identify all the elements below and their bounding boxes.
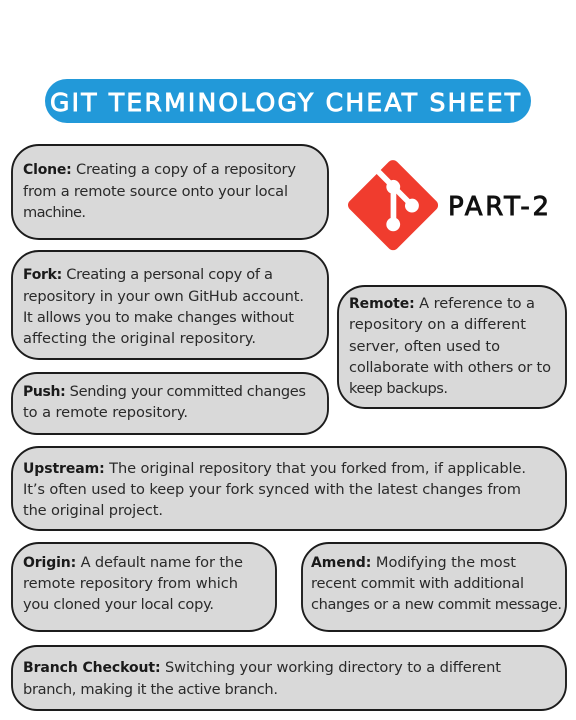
panel: Upstream [12, 447, 566, 530]
text: Amend definition: recent commit with additional [311, 575, 524, 592]
text: Origin definition: remote repository from which [23, 575, 238, 592]
panel: Clone [12, 145, 328, 239]
text: Fork definition [23, 266, 304, 347]
text: Remote definition: server, often used to [349, 338, 500, 355]
text: Amend definition: changes or a new commit message. [311, 596, 562, 613]
text: Push definition: Push: Sending your committed changes [23, 383, 306, 400]
text: Clone definition: from a remote source onto your local [23, 183, 288, 200]
text: Fork definition: affecting the original repository. [23, 330, 256, 347]
panel: Remote [338, 286, 566, 408]
text: Amend definition [311, 554, 562, 613]
text: Push definition: to a remote repository. [23, 404, 188, 421]
text: Origin definition [23, 554, 243, 613]
text: Remote definition: repository on a different [349, 316, 526, 333]
text: Clone definition: machine. [23, 204, 86, 221]
text: Origin definition: Origin: A default name for the [23, 554, 243, 571]
panel: Amend [302, 543, 566, 631]
text: Upstream definition: Upstream: The original repository that you forked from, if applicable. [23, 460, 526, 477]
text: Remote definition [349, 295, 551, 397]
text: Clone definition: Clone: Creating a copy of a repository [23, 161, 296, 178]
text: Remote definition: keep backups. [349, 380, 448, 397]
heading: part number: PART-2 [448, 192, 549, 222]
text: Push definition [23, 383, 306, 421]
text: Upstream definition [23, 460, 526, 519]
panel: Branch Checkout [12, 646, 566, 710]
panel: Origin [12, 543, 276, 631]
title banner: GIT TERMINOLOGY CHEAT SHEET [50, 88, 521, 117]
text: Origin definition: you cloned your local copy. [23, 596, 214, 613]
text: Branch Checkout definition: branch, making it the active branch. [23, 681, 278, 698]
text: Clone definition [23, 161, 296, 221]
panel: Fork [12, 251, 328, 359]
panel: Push [12, 373, 328, 434]
text: Fork definition: Fork: Creating a personal copy of a [23, 266, 273, 283]
text: Branch Checkout definition [23, 659, 501, 698]
text: Amend definition: Amend: Modifying the most [311, 554, 516, 571]
title banner [45, 79, 531, 123]
text: Branch Checkout definition: Branch Checkout: Switching your working directory to a different [23, 659, 501, 676]
icon: git logo [348, 160, 438, 250]
text: Upstream definition: It’s often used to keep your fork synced with the latest changes from [23, 481, 521, 498]
text: Fork definition: It allows you to make changes without [23, 309, 294, 326]
text: Fork definition: repository in your own GitHub account. [23, 288, 304, 305]
text: Remote definition: collaborate with others or to [349, 359, 551, 376]
text: Remote definition: Remote: A reference to a [349, 295, 535, 312]
text: Upstream definition: the original project. [23, 502, 163, 519]
